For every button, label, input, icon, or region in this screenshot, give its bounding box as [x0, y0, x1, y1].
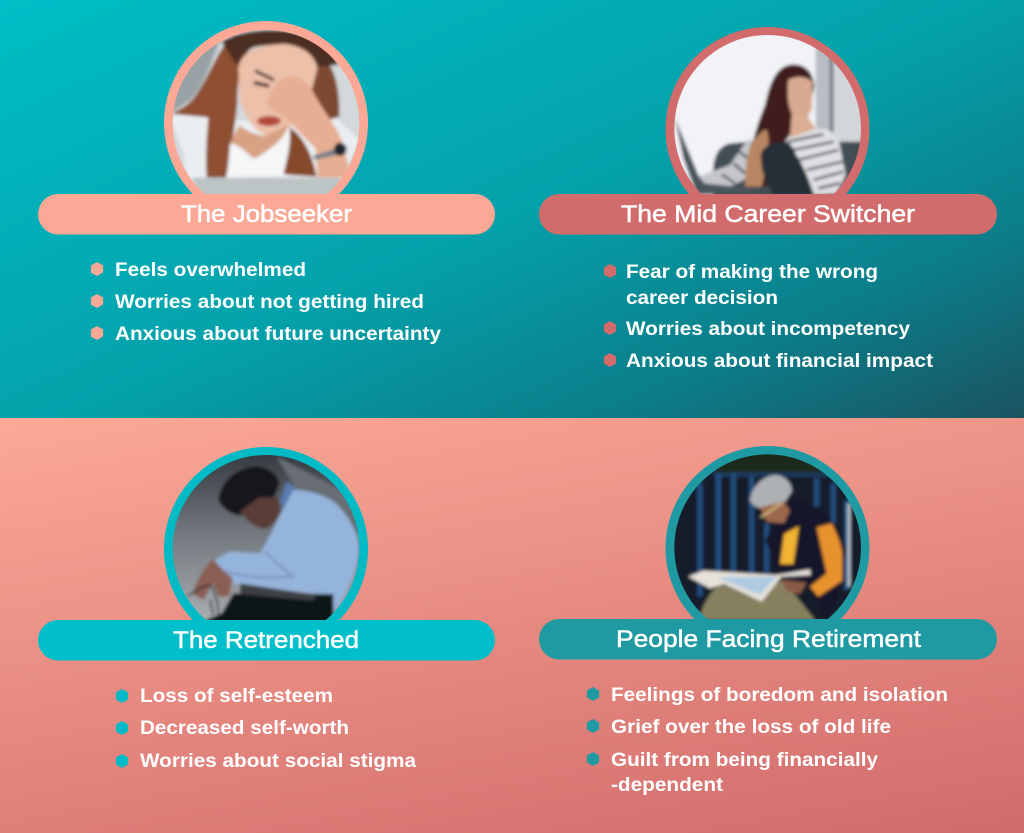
name banner: The Mid Career Switcher: The Mid Career Switcher — [621, 201, 915, 228]
bullet list: jobseeker: Feels overwhelmed — [115, 259, 306, 281]
bullet list: switcher: Worries about incompetency — [626, 318, 910, 340]
photo: older man reading a newspaper — [674, 454, 861, 619]
panel: teal background — [0, 0, 1024, 418]
panel: The Retrenched — [38, 447, 495, 772]
panel: People Facing Retirement — [539, 446, 997, 796]
name banner: The Mid Career Switcher — [539, 194, 997, 234]
bullet list: retrenched: Decreased self-worth — [140, 717, 349, 739]
bullet list: retirement — [587, 684, 948, 796]
bullet list: retirement: Guilt from being financially — [611, 749, 878, 771]
bullet list: retrenched: Loss of self-esteem — [140, 685, 333, 707]
bullet list: switcher — [604, 261, 933, 372]
bullet list: switcher: Anxious about financial impact — [626, 350, 933, 372]
name banner: The Retrenched — [38, 620, 495, 660]
panel: The Mid Career Switcher — [539, 27, 997, 372]
name banner: The Jobseeker: The Jobseeker — [181, 201, 352, 228]
photo: woman on a sofa with a laptop — [674, 35, 861, 194]
name banner: People Facing Retirement: People Facing Retirement — [616, 626, 921, 653]
bullet list: retirement: Feelings of boredom and isolation — [611, 684, 948, 706]
bullet list: switcher: career decision — [626, 287, 778, 309]
bullet list: retirement: Grief over the loss of old life — [611, 716, 891, 738]
photo: man slumped forward with glasses in hand — [172, 455, 360, 620]
bullet list: jobseeker — [91, 259, 441, 345]
photo ring: switcher — [666, 27, 870, 231]
photo ring: jobseeker — [164, 21, 368, 225]
bullet list: jobseeker: Worries about not getting hired — [115, 291, 424, 313]
bullet list: retirement: -dependent — [611, 774, 723, 796]
photo ring: retirement — [666, 446, 870, 650]
bullet list: switcher: Fear of making the wrong — [626, 261, 878, 283]
panel: The Jobseeker — [38, 21, 495, 345]
panel: coral background — [0, 418, 1024, 833]
bullet list: retrenched: Worries about social stigma — [140, 750, 417, 772]
bullet list: jobseeker: Anxious about future uncertainty — [115, 323, 441, 345]
name banner: The Retrenched: The Retrenched — [173, 627, 359, 654]
bullet list: retrenched — [116, 685, 417, 772]
name banner: People Facing Retirement — [539, 619, 997, 660]
photo: stressed woman holding her forehead — [172, 30, 360, 194]
name banner: The Jobseeker — [38, 194, 495, 234]
photo ring: retrenched — [164, 447, 368, 651]
